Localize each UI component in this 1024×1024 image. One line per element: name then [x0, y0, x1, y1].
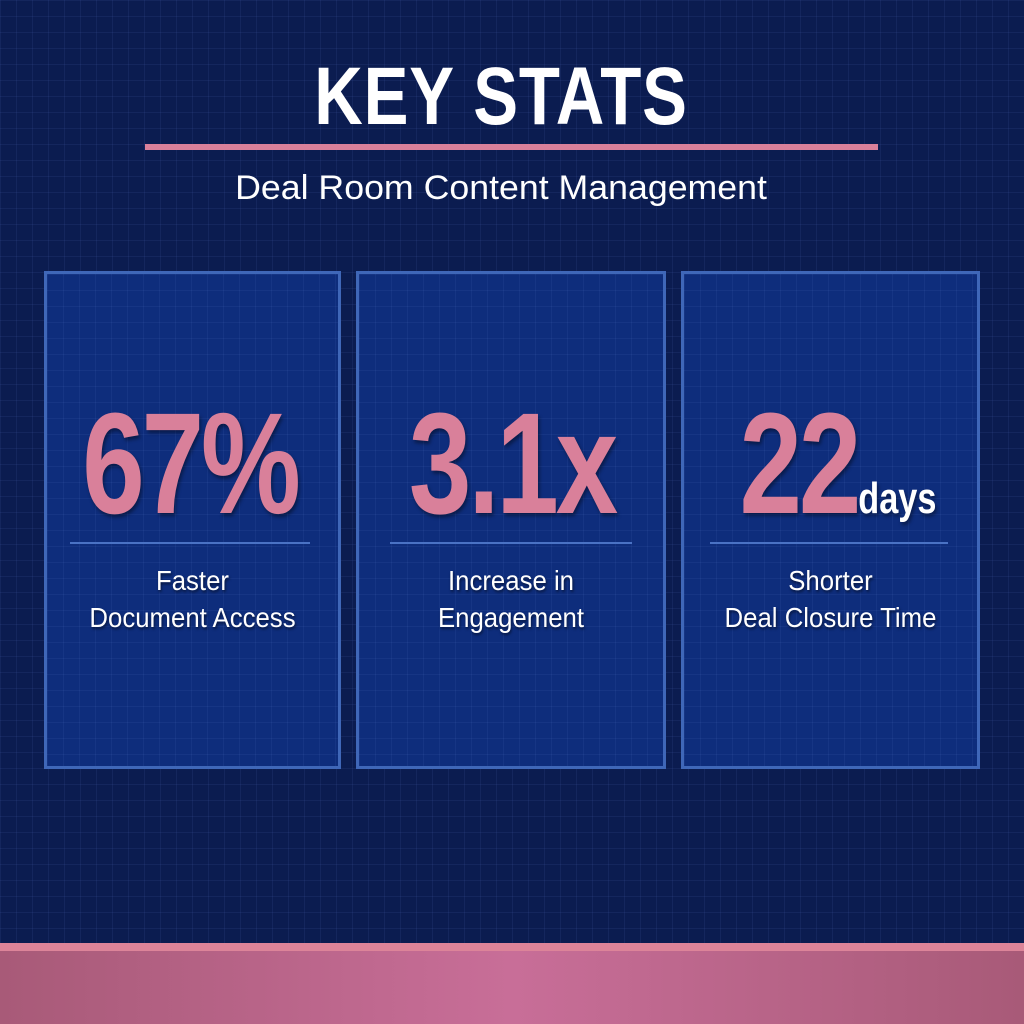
- label: increase in engagement: [438, 565, 586, 636]
- dividers: [70, 542, 310, 544]
- footer band: [0, 943, 1024, 1024]
- subtitle: Deal Room Content Management: [235, 169, 767, 207]
- panel: faster document access: [44, 271, 341, 769]
- title underline: [145, 144, 878, 150]
- panel: engagement: [356, 271, 666, 769]
- label: increase in engagement: Engagement: [438, 602, 584, 633]
- label: faster document access: Faster: [156, 565, 229, 596]
- label: shorter deal closure: [725, 565, 938, 633]
- panel: deal closure: [681, 271, 980, 769]
- label: shorter deal closure: Deal Closure Time: [725, 602, 936, 633]
- label: faster document access: Document Access: [89, 602, 296, 633]
- label: faster document access: [89, 565, 297, 633]
- label: shorter deal closure: Shorter: [788, 565, 873, 596]
- stat: 22 days: 22days: [740, 383, 936, 544]
- stat: 3.1x: 3.1x: [409, 383, 615, 544]
- label: increase in engagement: Increase in: [448, 565, 574, 596]
- stat: 67%: 67%: [82, 383, 298, 544]
- title: KEY STATS: [314, 51, 688, 142]
